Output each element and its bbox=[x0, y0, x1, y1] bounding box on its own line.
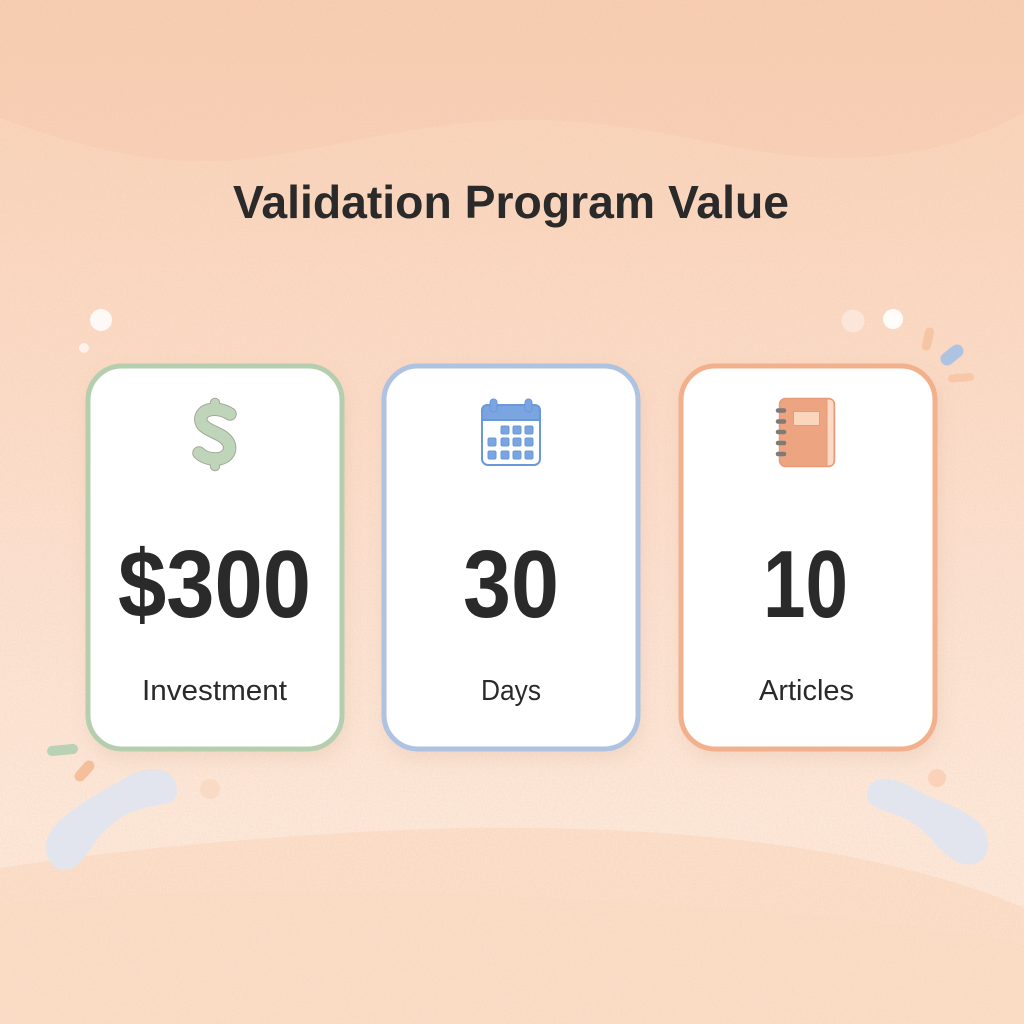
icon: calendar bbox=[482, 399, 540, 465]
panel: investment card bbox=[88, 366, 342, 749]
panel: articles card bbox=[681, 366, 935, 749]
title: Validation Program Value bbox=[233, 176, 789, 228]
decorative marks bottom left bbox=[46, 749, 220, 870]
icon: dollar sign bbox=[199, 403, 230, 466]
stat: 10: 10 bbox=[763, 531, 848, 638]
label: Articles: Articles bbox=[759, 675, 854, 707]
decorative marks top right bbox=[842, 309, 970, 378]
label: Days: Days bbox=[481, 675, 541, 707]
stat: 30: 30 bbox=[463, 531, 559, 638]
stat: $300: $300 bbox=[118, 531, 311, 638]
decorative dots top left bbox=[79, 309, 112, 353]
icon: notebook bbox=[778, 398, 834, 466]
label: Investment: Investment bbox=[142, 675, 287, 707]
decorative marks bottom right bbox=[867, 769, 988, 865]
panel: days card bbox=[384, 366, 638, 749]
